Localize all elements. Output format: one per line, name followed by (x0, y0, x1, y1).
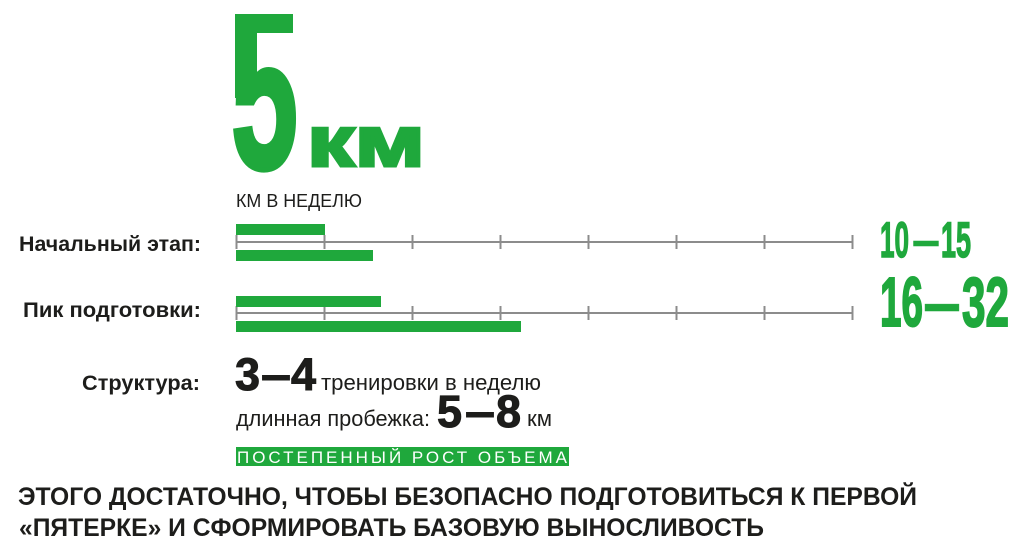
label: initial stage: Начальный этап: (19, 232, 201, 256)
value: 16-32: – (923, 263, 961, 341)
text: workouts per week: тренировки в неделю (321, 370, 541, 395)
conclusion text: «ПЯТЕРКЕ» И СФОРМИРОВАТЬ БАЗОВУЮ ВЫНОСЛИВОСТЬ (19, 514, 764, 542)
value: 10-15 (880, 212, 971, 268)
value: 10-15: 10 (880, 212, 909, 268)
callout: gradual volume growth: ПОСТЕПЕННЫЙ РОСТ ОБЪЕМА (237, 448, 568, 467)
text: workouts per week: 3 (235, 349, 260, 400)
conclusion text (18, 481, 917, 542)
value: 10-15: 15 (941, 212, 971, 268)
heading: km unit: км (307, 103, 425, 182)
text: long run: км (527, 406, 552, 431)
chart: peak preparation (236, 296, 853, 332)
value: 16-32: 16 (880, 263, 923, 341)
value: 16-32 (880, 263, 1009, 341)
chart: initial stage (236, 224, 853, 261)
value: 10-15: – (912, 212, 940, 268)
text: workouts per week (235, 349, 541, 400)
text: long run: 8 (496, 386, 521, 437)
text: long run: 5 (437, 386, 462, 437)
label: structure: Структура: (82, 371, 200, 395)
subtitle: КМ В НЕДЕЛЮ (236, 191, 362, 211)
conclusion text: ЭТОГО ДОСТАТОЧНО, ЧТОБЫ БЕЗОПАСНО ПОДГОТОВИТЬСЯ К ПЕРВОЙ (18, 481, 917, 511)
text: workouts per week: 4 (291, 349, 316, 400)
text: long run: – (465, 386, 495, 437)
text: long run (236, 386, 552, 437)
text: long run: длинная пробежка: (236, 406, 430, 431)
label: peak preparation: Пик подготовки: (23, 298, 201, 322)
heading: big five (231, 0, 299, 214)
text: workouts per week: – (261, 349, 291, 400)
